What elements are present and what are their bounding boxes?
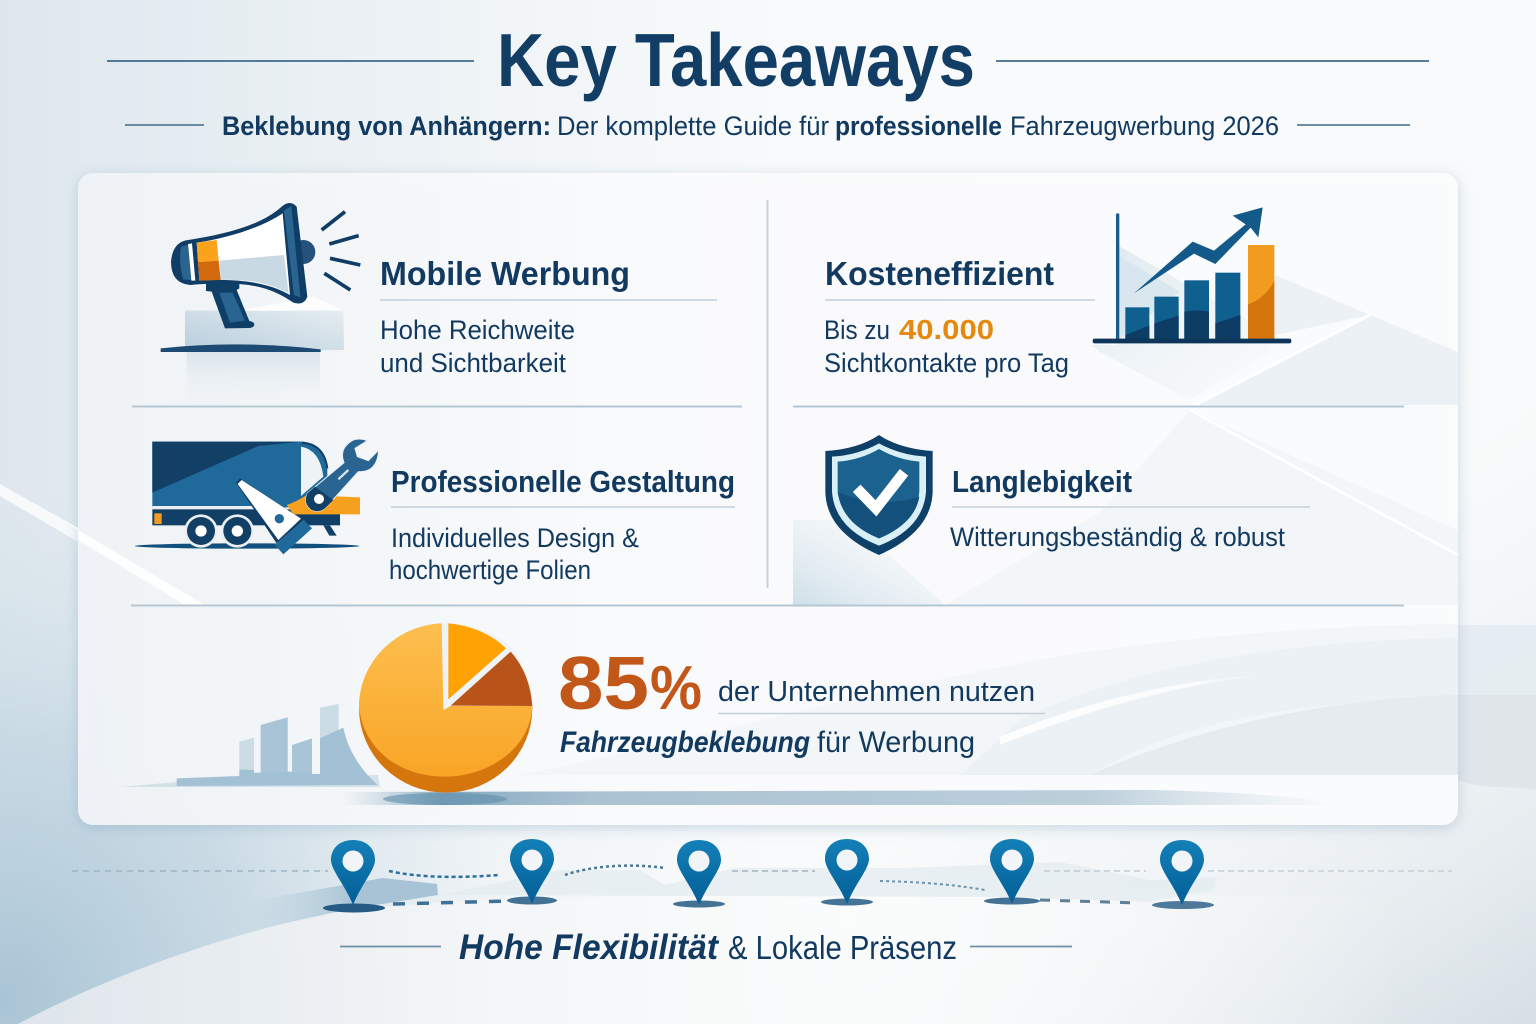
icon: city silhouette xyxy=(177,704,378,786)
text: Bis zu 40.000 Sichtkontakte pro Tag: Bis zu xyxy=(824,315,890,345)
divider lines xyxy=(131,200,1404,606)
icon: map pin 4 xyxy=(825,839,869,904)
title: Key Takeaways xyxy=(497,18,975,102)
text: der Unternehmen nutzen Fahrzeugbeklebung für Werbung: für Werbung xyxy=(817,726,975,759)
text: Hohe Reichweite und Sichtbarkeit: Hohe Reichweite xyxy=(380,315,575,345)
footer caption: & Lokale Präsenz xyxy=(728,929,957,966)
dashed route lines xyxy=(72,866,1452,904)
statistic: 85%: 85 xyxy=(558,641,649,725)
icon: megaphone xyxy=(161,203,360,410)
background shapes xyxy=(0,245,1458,805)
text: der Unternehmen nutzen Fahrzeugbeklebung für Werbung xyxy=(560,676,1045,759)
text: Bis zu 40.000 Sichtkontakte pro Tag xyxy=(824,314,1069,378)
subtitle: Beklebung von Anhängern: xyxy=(222,111,551,141)
text: der Unternehmen nutzen Fahrzeugbeklebung für Werbung: der Unternehmen nutzen xyxy=(718,676,1035,708)
text: Individuelles Design und hochwertige Folien: Individuelles Design & xyxy=(391,523,639,553)
text: Bis zu 40.000 Sichtkontakte pro Tag: 40.000 xyxy=(899,314,994,345)
icon: trailer with wrench and squeegee xyxy=(135,439,379,554)
text: Bis zu 40.000 Sichtkontakte pro Tag: Sichtkontakte pro Tag xyxy=(824,348,1069,378)
icon: map pin 3 xyxy=(677,840,721,905)
icon: map pin 5 xyxy=(990,839,1034,904)
subtitle: Fahrzeugwerbung 2026 xyxy=(1010,111,1279,141)
heading: Langlebigkeit: Langlebigkeit xyxy=(952,464,1132,499)
route with map pins xyxy=(72,839,1452,912)
text: Hohe Reichweite und Sichtbarkeit: und Sichtbarkeit xyxy=(380,348,566,378)
icon: map pin 2 xyxy=(510,839,554,904)
text: Individuelles Design und hochwertige Folien: hochwertige Folien xyxy=(389,555,591,585)
heading: Mobile Werbung: Mobile Werbung xyxy=(380,255,630,292)
heading: Professionelle Gestaltung: Professionelle Gestaltung xyxy=(391,464,735,499)
statistic: 85%: % xyxy=(650,654,702,723)
subtitle xyxy=(125,111,1410,141)
text: Individuelles Design und hochwertige Folien xyxy=(389,523,639,585)
pin shadows xyxy=(323,896,1214,912)
icon: shield with checkmark xyxy=(825,435,933,555)
icon: map pin 1 xyxy=(331,840,375,905)
subtitle: Der komplette Guide für xyxy=(557,111,829,141)
statistic: 85% xyxy=(558,641,702,725)
text: Witterungsbeständig und robust: Witterungsbeständig & robust xyxy=(950,522,1285,552)
heading: Kosteneffizient: Kosteneffizient xyxy=(825,255,1054,292)
icon: pie chart xyxy=(359,623,533,793)
icon: bar chart with arrow xyxy=(1093,207,1291,343)
main panel xyxy=(0,173,1458,825)
footer caption: Hohe Flexibilität xyxy=(459,928,719,967)
icon: map pin 6 xyxy=(1160,840,1204,905)
footer caption xyxy=(340,928,1072,967)
subtitle: professionelle xyxy=(835,111,1002,141)
text: der Unternehmen nutzen Fahrzeugbeklebung für Werbung: Fahrzeugbeklebung xyxy=(560,726,810,759)
text: Hohe Reichweite und Sichtbarkeit xyxy=(380,315,575,378)
